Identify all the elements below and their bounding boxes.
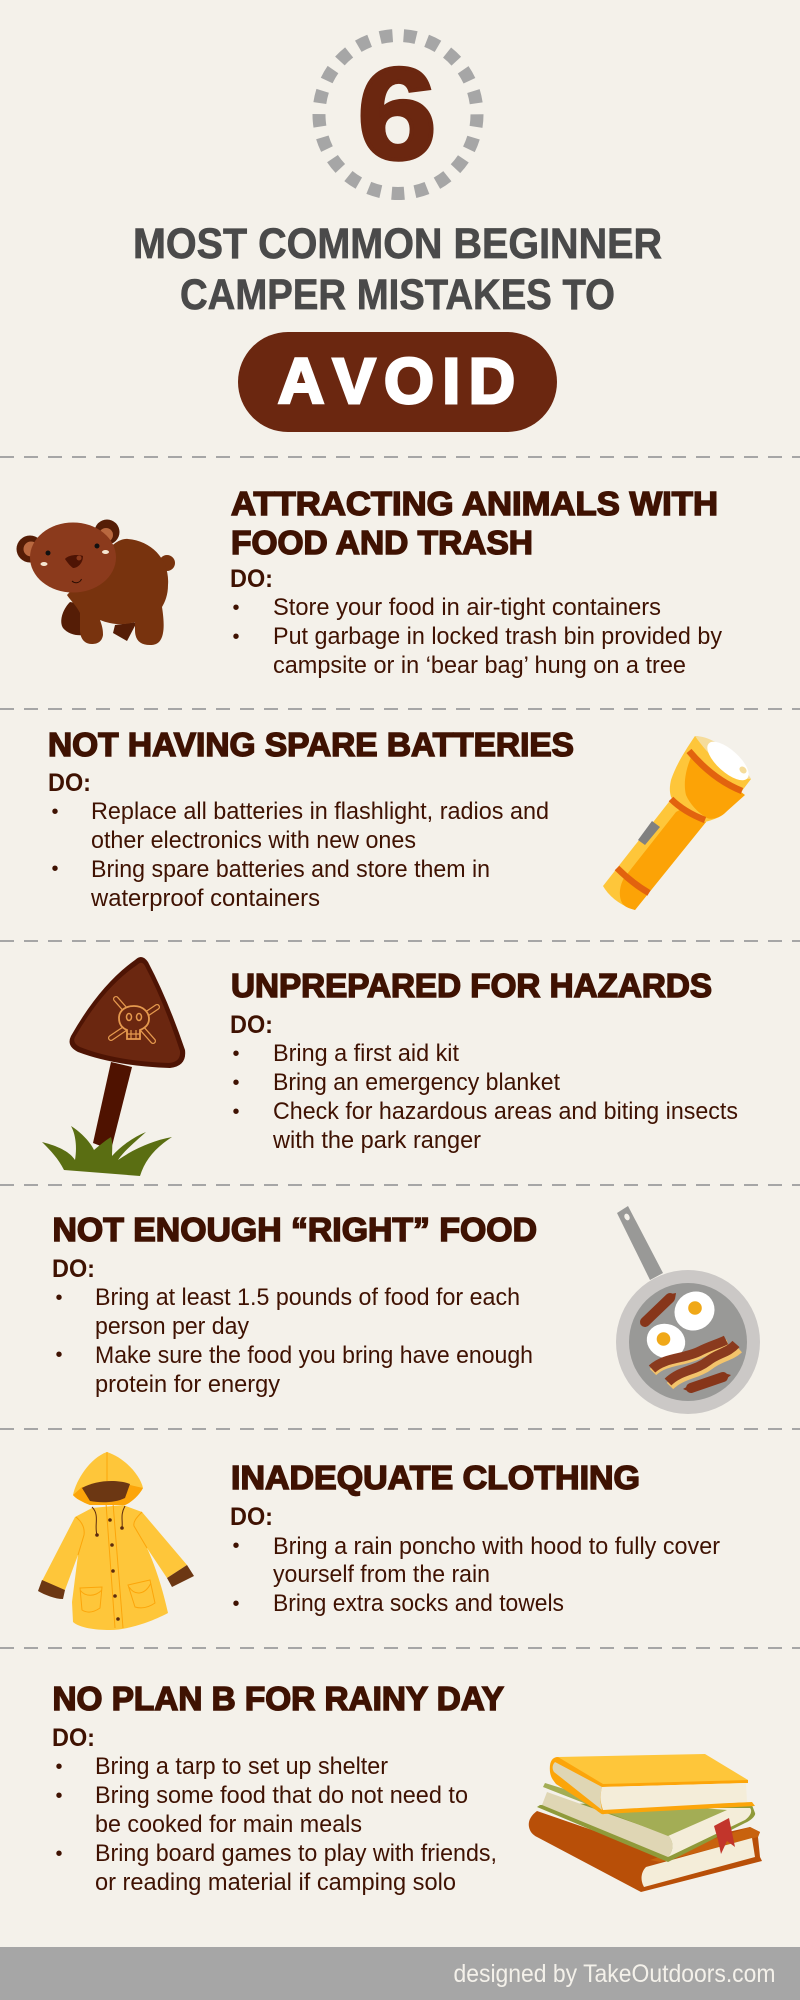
bullet list: waterproof containers — [90, 885, 320, 912]
bullet list: • — [232, 1101, 240, 1123]
bullet list: campsite or in ‘bear bag’ hung on a tree — [273, 652, 686, 679]
bullet list — [232, 594, 723, 679]
do label: DO: — [52, 1255, 95, 1283]
avoid pill — [238, 332, 557, 432]
heading: NOT ENOUGH “RIGHT” FOOD — [52, 1211, 537, 1248]
panel: attracting animals — [16, 485, 723, 679]
icon: dashed ring — [313, 29, 483, 200]
heading: INADEQUATE CLOTHING — [231, 1459, 640, 1496]
bullet list: • — [232, 1072, 240, 1094]
bullet list: be cooked for main meals — [95, 1811, 362, 1838]
do label: DO: — [230, 1011, 273, 1039]
big number 6: 6 — [358, 40, 436, 186]
bullet list: person per day — [95, 1313, 250, 1340]
panel: hazards — [42, 957, 738, 1176]
bullet list: Bring board games to play with friends, — [95, 1840, 497, 1867]
bullet list: • — [56, 1785, 63, 1807]
bullet list: Replace all batteries in flashlight, radios and — [91, 798, 549, 825]
bullet list: Check for hazardous areas and biting insects — [273, 1098, 738, 1125]
bullet list: Bring a first aid kit — [273, 1040, 459, 1067]
bullet list: Store your food in air-tight containers — [273, 594, 661, 621]
bullet list: • — [232, 1535, 240, 1557]
footer credit: designed by TakeOutdoors.com — [454, 1960, 776, 1988]
bullet list: Put garbage in locked trash bin provided by — [273, 623, 723, 650]
bullet list: • — [232, 626, 240, 648]
icon: stack of books — [529, 1754, 762, 1892]
panel: spare batteries — [48, 726, 755, 912]
bullet list — [56, 1753, 497, 1896]
heading: ATTRACTING ANIMALS WITH — [231, 485, 718, 522]
bullet list — [56, 1284, 533, 1398]
title line 2: CAMPER MISTAKES TO — [180, 271, 615, 319]
heading: NO PLAN B FOR RAINY DAY — [52, 1680, 504, 1717]
bullet list: • — [56, 1287, 63, 1309]
bullet list: Bring some food that do not need to — [95, 1782, 468, 1809]
do label: DO: — [230, 565, 273, 593]
bullet list: • — [232, 1043, 240, 1065]
bullet list: • — [56, 1756, 63, 1778]
panel: clothing — [38, 1452, 720, 1630]
icon: hazard sign — [42, 957, 185, 1176]
bullet list: with the park ranger — [272, 1127, 481, 1154]
avoid pill: AVOID — [278, 345, 515, 417]
panel: right food — [52, 1206, 760, 1414]
bullet list: • — [232, 1593, 240, 1615]
heading: NOT HAVING SPARE BATTERIES — [48, 726, 574, 763]
bullet list: • — [52, 858, 59, 880]
do label: DO: — [230, 1503, 273, 1531]
bullet list: or reading material if camping solo — [95, 1869, 456, 1896]
bullet list: Bring a rain poncho with hood to fully cover — [273, 1533, 720, 1560]
heading line 2: FOOD AND TRASH — [231, 524, 533, 561]
title line 1: MOST COMMON BEGINNER — [133, 220, 662, 268]
icon: raincoat — [38, 1452, 194, 1630]
bullet list: Bring an emergency blanket — [273, 1069, 560, 1096]
footer bar — [0, 1947, 800, 2000]
panel: plan b — [52, 1680, 762, 1896]
icon: flashlight — [603, 735, 755, 910]
bullet list: • — [56, 1344, 63, 1366]
do label: DO: — [48, 769, 91, 797]
bullet list: • — [56, 1843, 63, 1865]
do label: DO: — [52, 1724, 95, 1752]
bullet list: Bring spare batteries and store them in — [91, 856, 490, 883]
bullet list: Make sure the food you bring have enough — [95, 1342, 533, 1369]
bullet list — [232, 1040, 738, 1154]
bullet list — [52, 798, 549, 912]
bullet list: Bring a tarp to set up shelter — [95, 1753, 388, 1780]
icon: bear — [16, 520, 175, 645]
bullet list: protein for energy — [95, 1371, 281, 1398]
bullet list: • — [52, 801, 59, 823]
heading: UNPREPARED FOR HAZARDS — [231, 967, 712, 1004]
header — [133, 29, 662, 432]
bullet list: yourself from the rain — [273, 1561, 490, 1588]
bullet list — [232, 1533, 720, 1617]
bullet list: Bring at least 1.5 pounds of food for each — [95, 1284, 520, 1311]
bullet list: • — [232, 597, 240, 619]
icon: frying pan — [616, 1206, 760, 1414]
bullet list: Bring extra socks and towels — [273, 1590, 564, 1617]
bullet list: other electronics with new ones — [91, 827, 416, 854]
